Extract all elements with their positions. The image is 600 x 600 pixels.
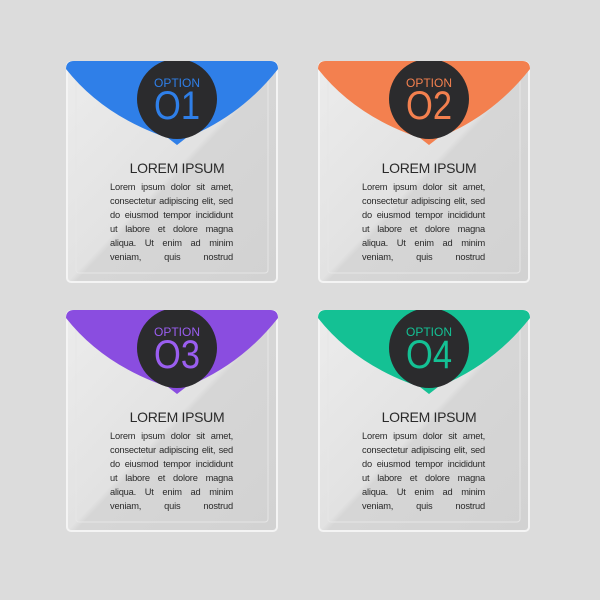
panel: option 2: aliqua. Ut enim ad minim <box>362 238 485 248</box>
panel: option 4: O4 <box>406 333 452 377</box>
panel: option 1: aliqua. Ut enim ad minim <box>110 238 233 248</box>
panel: option 4: do eiusmod tempor incididunt <box>362 459 485 469</box>
panel: option 4: veniam, quis nostrud <box>362 501 485 511</box>
panel: option 4: LOREM IPSUM <box>382 409 476 425</box>
panel: option 4 <box>318 310 530 532</box>
panel: option 1: O1 <box>154 84 200 128</box>
panel: option 2: OPTION <box>406 76 452 90</box>
panel: option 1: consectetur adipiscing elit, sed <box>110 196 233 206</box>
panel: option 4: Lorem ipsum dolor sit amet, <box>362 431 485 441</box>
panel: option 1 <box>66 61 278 283</box>
panel: option 1: do eiusmod tempor incididunt <box>110 210 233 220</box>
panel: option 2: LOREM IPSUM <box>382 160 476 176</box>
panel: option 4: aliqua. Ut enim ad minim <box>362 487 485 497</box>
panel: option 2: ut labore et dolore magna <box>362 224 485 234</box>
panel: option 2: do eiusmod tempor incididunt <box>362 210 485 220</box>
panel: option 1: Lorem ipsum dolor sit amet, <box>110 182 233 192</box>
panel: option 1: veniam, quis nostrud <box>110 252 233 262</box>
panel: option 2: O2 <box>406 84 452 128</box>
panel: option 1: LOREM IPSUM <box>130 160 224 176</box>
panel: option 3: consectetur adipiscing elit, sed <box>110 445 233 455</box>
panel: option 1: ut labore et dolore magna <box>110 224 233 234</box>
panel: option 3: do eiusmod tempor incididunt <box>110 459 233 469</box>
panel: option 2: veniam, quis nostrud <box>362 252 485 262</box>
panel: option 2 <box>318 61 530 283</box>
panel: option 3: aliqua. Ut enim ad minim <box>110 487 233 497</box>
panel: option 4: ut labore et dolore magna <box>362 473 485 483</box>
panel: option 3: ut labore et dolore magna <box>110 473 233 483</box>
panel: option 3: OPTION <box>154 325 200 339</box>
panel: option 2: Lorem ipsum dolor sit amet, <box>362 182 485 192</box>
panel: option 3: LOREM IPSUM <box>130 409 224 425</box>
panel: option 3: O3 <box>154 333 200 377</box>
panel: option 4: consectetur adipiscing elit, sed <box>362 445 485 455</box>
panel: option 3: Lorem ipsum dolor sit amet, <box>110 431 233 441</box>
panel: option 2: consectetur adipiscing elit, sed <box>362 196 485 206</box>
panel: option 3 <box>66 310 278 532</box>
panel: option 1: OPTION <box>154 76 200 90</box>
panel: option 4: OPTION <box>406 325 452 339</box>
panel: option 3: veniam, quis nostrud <box>110 501 233 511</box>
